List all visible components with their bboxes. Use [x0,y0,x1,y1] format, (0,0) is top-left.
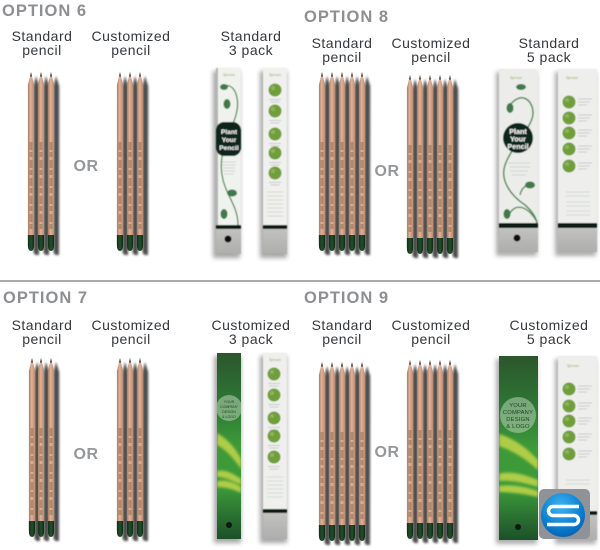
box: standard 5 pack front: Pencil [507,142,529,151]
label: standard 5 pack: Standard [519,35,579,51]
box: customized 5 pack back: Sprouts [567,363,579,368]
label: customized pencil: Customized [92,28,170,44]
label: standard pencil: pencil [322,49,362,65]
divider line [0,280,600,282]
box: standard 3 pack front: Sprouts [223,72,235,77]
box: customized 5 pack front [496,356,538,544]
box: standard 3 pack back: Sprouts [269,72,281,77]
pencils: customized, three [117,358,148,541]
label: customized pencil: Customized [392,35,470,51]
label: customized pencil: pencil [411,49,451,65]
pencils: customized, five [407,360,458,543]
label: standard 3 pack: 3 pack [229,42,274,58]
heading: option 6: OPTION 6 [2,2,87,20]
label: standard pencil: Standard [312,317,372,333]
label: customized pencil: Customized [392,317,470,333]
label: standard pencil: pencil [22,331,62,347]
box: customized 3 pack front: COMPANY [220,405,239,409]
label: standard pencil: Standard [312,35,372,51]
panel: option 9 [304,289,597,545]
or text: OR [74,158,98,175]
pencils: standard, five [319,362,370,545]
pencils: customized, three [117,72,148,255]
label: customized 3 pack: Customized [212,317,290,333]
box: standard 5 pack front [496,69,538,256]
label: standard pencil: Standard [12,317,72,333]
label: standard 5 pack: 5 pack [527,49,572,65]
heading: option 8: OPTION 8 [304,8,389,26]
pencils: standard, five [319,72,370,255]
box: standard 3 pack back [260,68,287,258]
label: customized 5 pack: Customized [510,317,588,333]
box: customized 3 pack front: DESIGN [222,410,236,414]
label: customized pencil: Customized [92,317,170,333]
or text: OR [374,163,400,180]
box: customized 3 pack front: & LOGO [222,415,236,419]
box: customized 3 pack back: Sprouts [269,357,281,362]
box: standard 5 pack front: Sprouts [510,75,522,80]
pencils: standard, three [28,72,59,255]
box: customized 5 pack front: DESIGN [506,417,530,423]
heading: option 9: OPTION 9 [304,289,389,307]
label: customized pencil: pencil [411,331,451,347]
or text: OR [374,444,400,461]
box: standard 3 pack front: Plant [221,129,238,136]
label: standard 3 pack: Standard [221,28,281,44]
box: customized 3 pack front [214,353,242,543]
box: customized 3 pack front: YOUR [224,400,235,404]
box: customized 5 pack front: YOUR [509,403,527,409]
label: standard pencil: pencil [22,42,62,58]
or text: OR [74,446,98,463]
heading: option 7: OPTION 7 [3,289,88,307]
panel: option 6 [2,2,287,258]
box: standard 3 pack front: Pencil [219,145,239,152]
box: standard 5 pack back [555,69,597,256]
box: standard 5 pack front: Plant [509,127,527,136]
pencils: standard, three [29,358,59,541]
box: customized 5 pack back [555,356,597,544]
box: customized 5 pack front: COMPANY [503,410,533,416]
label: customized pencil: pencil [111,42,151,58]
label: standard pencil: Standard [12,28,72,44]
box: standard 3 pack front: Your [222,137,237,144]
box: standard 5 pack back: Sprouts [566,75,578,80]
box: standard 3 pack front [213,68,241,258]
label: customized 5 pack: 5 pack [527,331,572,347]
pencils: customized, five [407,75,458,258]
box: customized 3 pack back [260,353,287,543]
box: customized 5 pack front: & LOGO [506,424,530,430]
icon: blue circular logo badge [539,489,590,539]
label: standard pencil: pencil [322,331,362,347]
box: standard 5 pack front: Your [510,134,526,144]
label: customized pencil: pencil [111,331,151,347]
label: customized 3 pack: 3 pack [229,331,274,347]
panel: option 7 [3,289,290,543]
panel: option 8 [304,8,597,258]
